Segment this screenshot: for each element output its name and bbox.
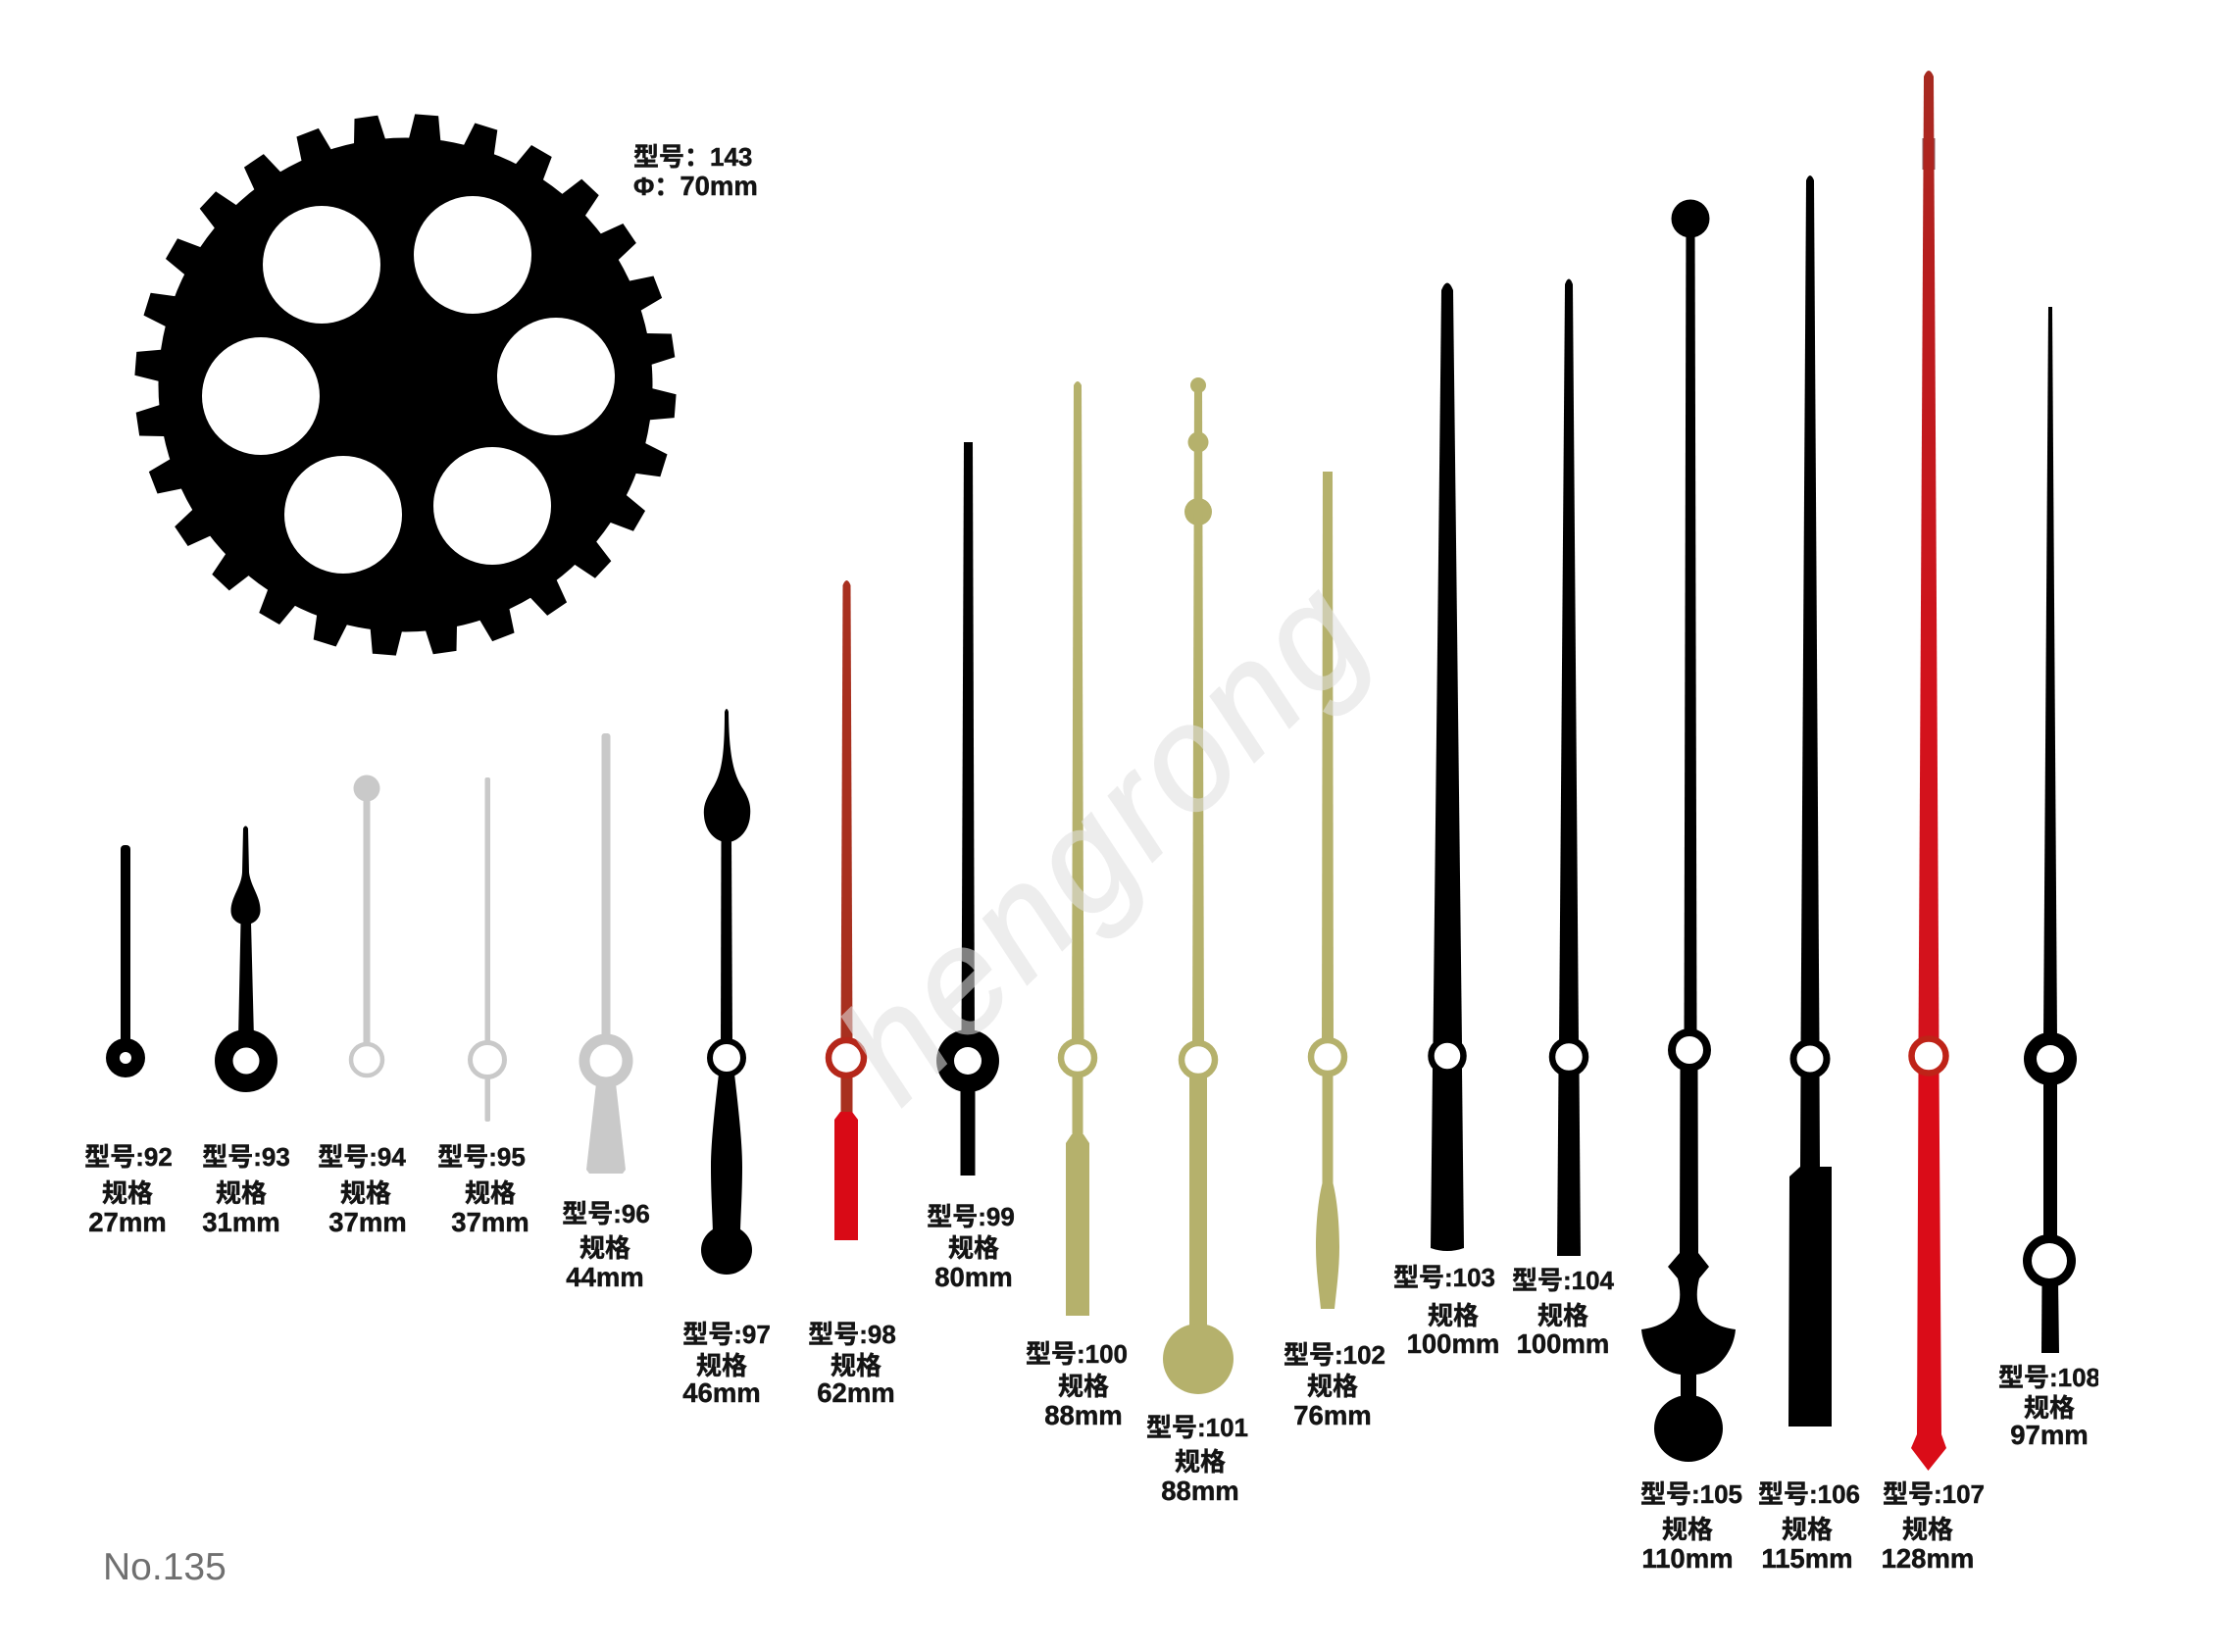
label 94: 规格 — [340, 1178, 391, 1208]
label 96: 规格 — [579, 1233, 630, 1263]
label 99: 型号:99 — [927, 1202, 1015, 1231]
gear, model 143 — [134, 114, 677, 656]
clock hand 104 — [1552, 278, 1586, 1256]
label 108: 规格 — [2024, 1393, 2075, 1423]
label 96: 44mm — [566, 1262, 644, 1292]
clock hand 96 — [584, 733, 628, 1174]
label 93: 型号:93 — [202, 1142, 290, 1172]
label 98: 规格 — [831, 1351, 881, 1380]
label 101: 88mm — [1161, 1476, 1239, 1506]
label 95: 37mm — [451, 1207, 529, 1237]
label 99: 80mm — [934, 1262, 1013, 1292]
clock hand 101 — [1163, 377, 1234, 1394]
label 108: 97mm — [2010, 1420, 2089, 1450]
label 94: 型号:94 — [318, 1142, 406, 1172]
label 95: 规格 — [465, 1178, 516, 1208]
clock hand 95 — [471, 777, 504, 1122]
clock hand 106 — [1788, 175, 1832, 1427]
label 105: 110mm — [1641, 1543, 1734, 1574]
label: model 143: Φ：70mm — [633, 171, 758, 201]
clock hand 97 — [701, 709, 752, 1275]
clock hand 92 — [106, 845, 145, 1077]
label 103: 型号:103 — [1393, 1263, 1495, 1292]
label 97: 46mm — [682, 1377, 761, 1408]
label 102: 76mm — [1293, 1400, 1372, 1430]
label 104: 规格 — [1537, 1301, 1588, 1330]
clock hand 108 — [2023, 307, 2077, 1353]
label 97: 规格 — [696, 1351, 747, 1380]
clock hand 94 — [351, 775, 382, 1076]
label 101: 规格 — [1175, 1447, 1226, 1477]
label 103: 规格 — [1428, 1301, 1479, 1330]
clock hand 107 — [1911, 71, 1946, 1471]
label 97: 型号:97 — [682, 1320, 771, 1349]
label 108: 型号:108 — [1998, 1363, 2100, 1392]
label 96: 型号:96 — [562, 1199, 650, 1228]
label 107: 规格 — [1902, 1515, 1953, 1544]
label: model 143: 型号：143 — [633, 142, 752, 172]
label 104: 100mm — [1517, 1328, 1609, 1359]
watermark hengrong: hengrong — [807, 546, 1400, 1131]
label 101: 型号:101 — [1146, 1413, 1248, 1442]
label 95: 型号:95 — [437, 1142, 526, 1172]
clock hand 100 — [1061, 381, 1094, 1316]
label 102: 规格 — [1307, 1372, 1358, 1401]
label 100: 88mm — [1044, 1400, 1123, 1430]
label 100: 型号:100 — [1026, 1339, 1128, 1369]
label 92: 规格 — [102, 1178, 153, 1208]
label 92: 27mm — [88, 1207, 167, 1237]
label 105: 型号:105 — [1640, 1479, 1742, 1509]
label 98: 型号:98 — [808, 1320, 896, 1349]
clock hand 98 — [829, 580, 864, 1240]
label 99: 规格 — [948, 1233, 999, 1263]
label 100: 规格 — [1058, 1372, 1109, 1401]
label 106: 规格 — [1782, 1515, 1833, 1544]
label 93: 31mm — [202, 1207, 280, 1237]
clock hand 103 — [1431, 282, 1464, 1251]
label 106: 型号:106 — [1758, 1479, 1860, 1509]
label 105: 规格 — [1662, 1515, 1713, 1544]
label 107: 128mm — [1882, 1543, 1974, 1574]
clock hand 99 — [936, 442, 999, 1176]
label 107: 型号:107 — [1883, 1479, 1985, 1509]
label 103: 100mm — [1407, 1328, 1499, 1359]
label 98: 62mm — [817, 1377, 895, 1408]
clock hand 102 — [1311, 472, 1344, 1309]
label 104: 型号:104 — [1512, 1266, 1615, 1295]
catalogue number: No.135 — [103, 1546, 227, 1588]
clock hand 105 — [1641, 200, 1736, 1462]
label 94: 37mm — [328, 1207, 407, 1237]
label 92: 型号:92 — [84, 1142, 173, 1172]
label 93: 规格 — [216, 1178, 267, 1208]
clock hand 93 — [215, 826, 277, 1092]
label 106: 115mm — [1761, 1543, 1853, 1574]
label 102: 型号:102 — [1284, 1340, 1385, 1370]
